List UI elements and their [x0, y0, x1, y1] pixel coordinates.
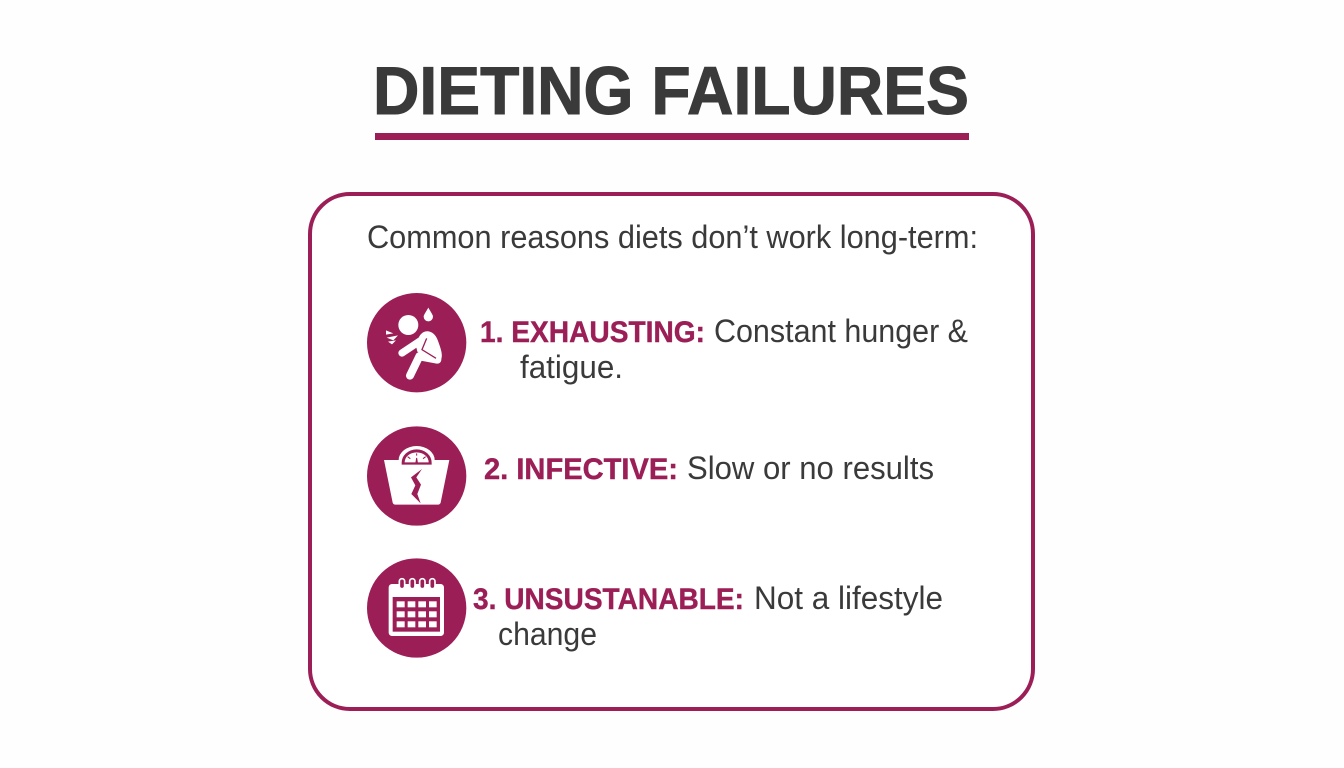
title underline: [375, 133, 969, 140]
item 1 description continued: fatigue.: [520, 349, 623, 385]
item 2 heading: 2. INFECTIVE:: [484, 453, 678, 486]
panel: reasons: [310, 194, 1033, 709]
icon: exhausted figure: [367, 293, 466, 392]
item 1 heading: 1. EXHAUSTING:: [480, 316, 705, 349]
item 3: unsustainable: [367, 558, 943, 658]
item 2: ineffective: [367, 426, 934, 526]
item 3 description: Not a lifestyle: [754, 580, 943, 616]
item 2 description: Slow or no results: [687, 450, 934, 486]
icon: broken scale: [367, 426, 466, 526]
item 3 heading: 3. UNSUSTANABLE:: [473, 583, 744, 616]
item 1 description: Constant hunger &: [714, 313, 968, 349]
item 3 description continued: change: [498, 616, 597, 652]
panel border: [310, 194, 1033, 709]
item 1: exhausting: [367, 293, 968, 392]
icon: calendar: [367, 558, 466, 658]
intro text: Common reasons diets don’t work long-term:: [367, 219, 978, 255]
title: DIETING FAILURES: [373, 53, 969, 129]
